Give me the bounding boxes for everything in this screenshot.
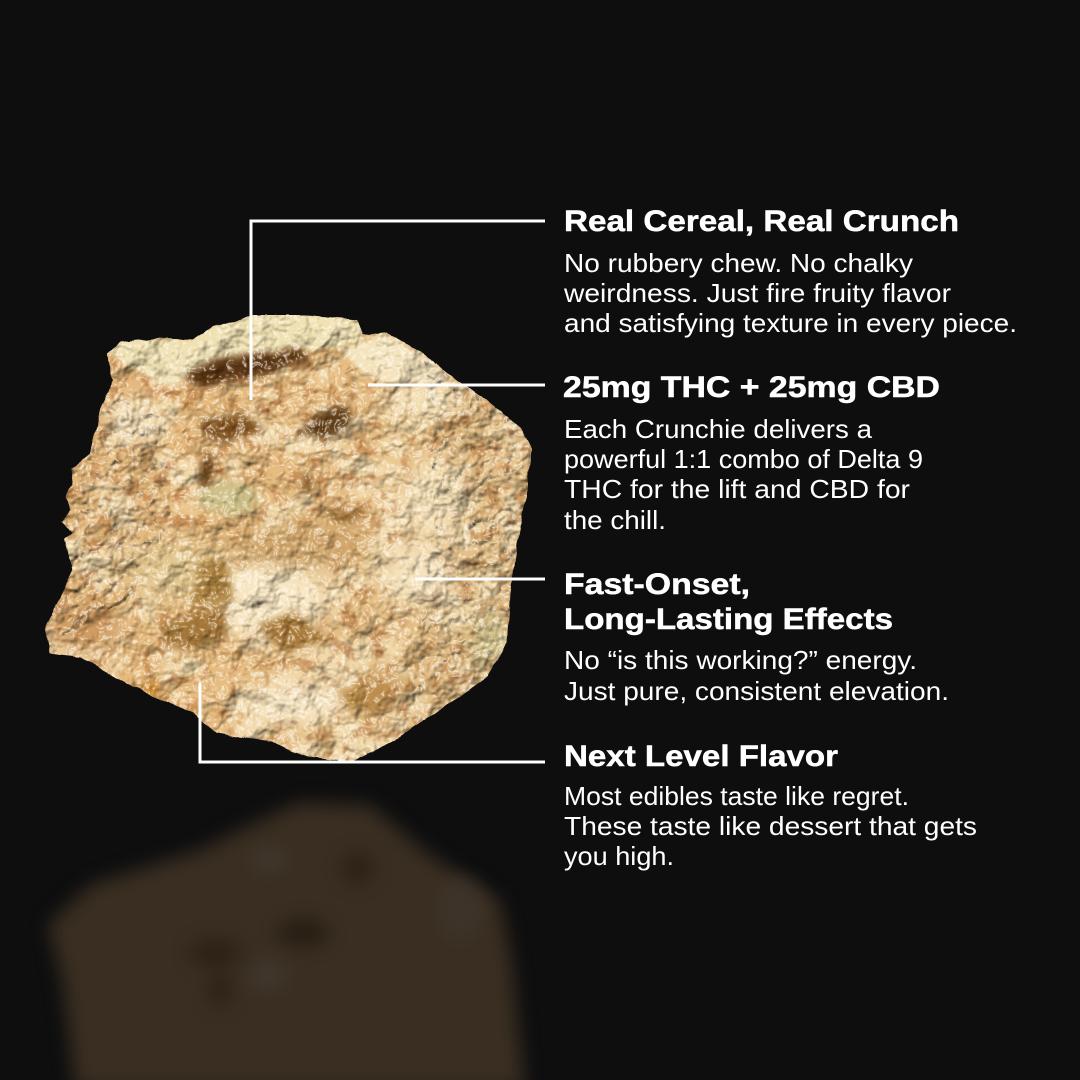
- texture overlay: [45, 314, 532, 760]
- text block: real cereal: weirdness. Just fire fruity flavor: [563, 278, 951, 308]
- line: real cereal: [251, 221, 545, 400]
- text block: flavor: you high.: [564, 841, 674, 871]
- cavities: [137, 349, 387, 712]
- text block: real cereal: [563, 205, 1017, 338]
- text block: flavor: Next Level Flavor: [564, 740, 838, 773]
- text block: thc cbd: the chill.: [564, 505, 666, 535]
- fine texture: left face: [45, 394, 171, 638]
- text block: effects: Long-Lasting Effects: [564, 603, 893, 636]
- text block: flavor: These taste like dessert that gets: [564, 811, 977, 841]
- top plates: [105, 313, 365, 385]
- text block: thc cbd: [563, 371, 940, 535]
- text block: effects: Fast-Onset,: [564, 568, 750, 601]
- leader lines: [200, 221, 545, 762]
- text block: flavor: [564, 740, 977, 871]
- fine texture: right face: [402, 360, 532, 734]
- text block: thc cbd: powerful 1:1 combo of Delta 9: [564, 444, 923, 474]
- olive centre: [198, 481, 258, 515]
- cereal piece: [45, 314, 532, 760]
- line: effects: [415, 578, 545, 580]
- gloss highlights: [46, 314, 530, 760]
- blurred cereal reflection: [48, 802, 525, 1080]
- line: flavor: [200, 683, 545, 762]
- colour patches: [55, 382, 506, 725]
- text block: effects: [564, 568, 949, 706]
- text block: thc cbd: 25mg THC + 25mg CBD: [563, 371, 940, 404]
- brown flecks: [48, 318, 532, 760]
- text block: real cereal: Real Cereal, Real Crunch: [564, 205, 959, 238]
- cream mottling: [45, 332, 528, 760]
- line: thc cbd: [368, 384, 545, 386]
- text block: flavor: Most edibles taste like regret.: [564, 781, 909, 811]
- text block: real cereal: and satisfying texture in every piece.: [564, 308, 1017, 338]
- text block: effects: No “is this working?” energy.: [564, 645, 917, 675]
- text block: real cereal: No rubbery chew. No chalky: [564, 248, 913, 278]
- text block: thc cbd: Each Crunchie delivers a: [564, 414, 873, 444]
- cereal body: [45, 314, 532, 760]
- text block: thc cbd: THC for the lift and CBD for: [564, 474, 910, 504]
- text block: effects: Just pure, consistent elevation.: [564, 676, 949, 706]
